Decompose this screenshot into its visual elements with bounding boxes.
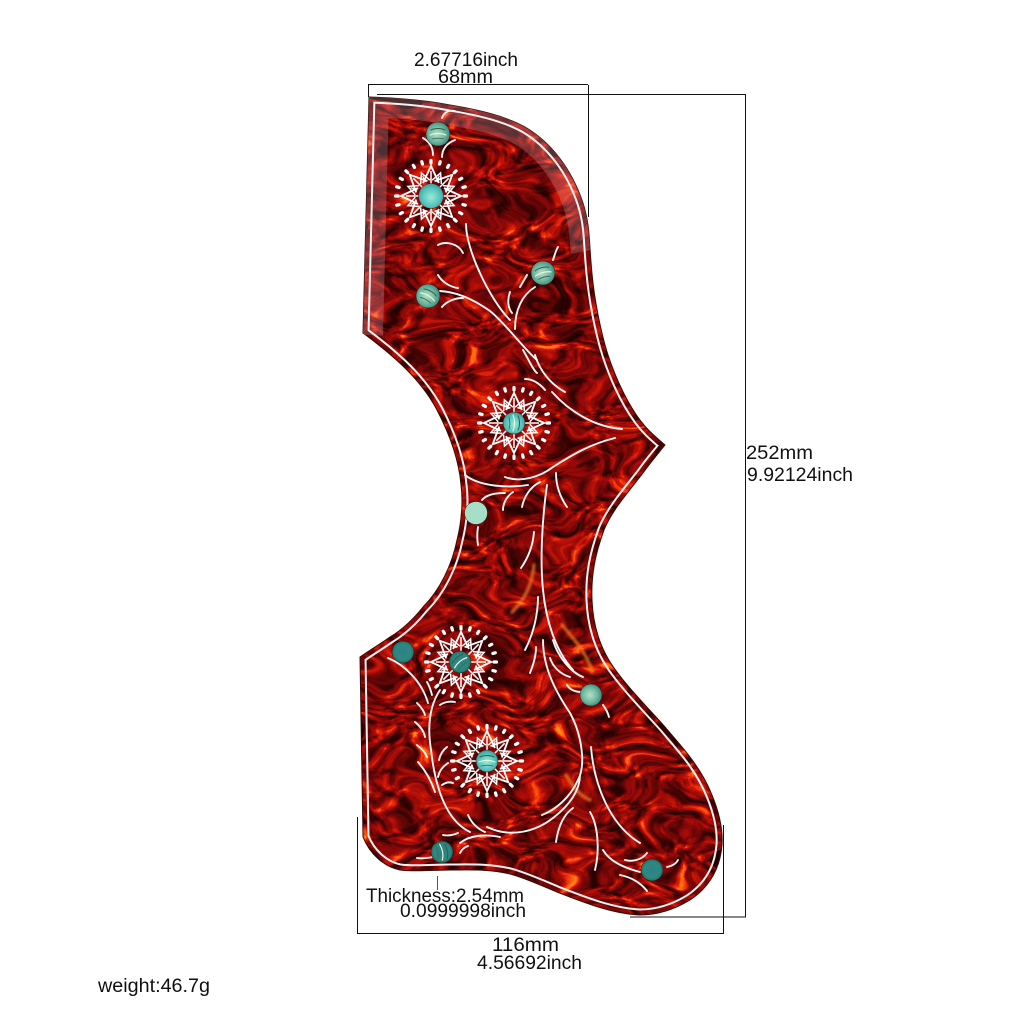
label: height inches: 9.92124inch [747, 465, 853, 486]
label: top width mm: 68mm [438, 67, 493, 88]
abalone dots [392, 122, 663, 881]
vine inlays [388, 111, 678, 891]
glossy bevel highlight [363, 97, 591, 335]
dimension lines [358, 84, 746, 934]
label: top width inches: 2.67716inch [414, 50, 518, 71]
label: bottom width mm: 116mm [492, 935, 559, 956]
pickguard [360, 96, 723, 916]
label: weight: weight:46.7g [97, 976, 210, 997]
flower inlay 1 [393, 158, 469, 234]
white binding line [364, 102, 718, 910]
body outline edge [360, 97, 722, 915]
label: bottom width inches: 4.56692inch [477, 953, 582, 974]
label: thickness mm: Thickness:2.54mm [366, 886, 524, 907]
label: height mm: 252mm [746, 443, 813, 464]
flower inlay 3 [423, 624, 499, 700]
flower inlay 2 [476, 385, 552, 461]
flower inlay 4 [449, 723, 525, 799]
label: thickness inches: 0.0999998inch [400, 901, 526, 922]
tortoiseshell body [350, 90, 730, 925]
